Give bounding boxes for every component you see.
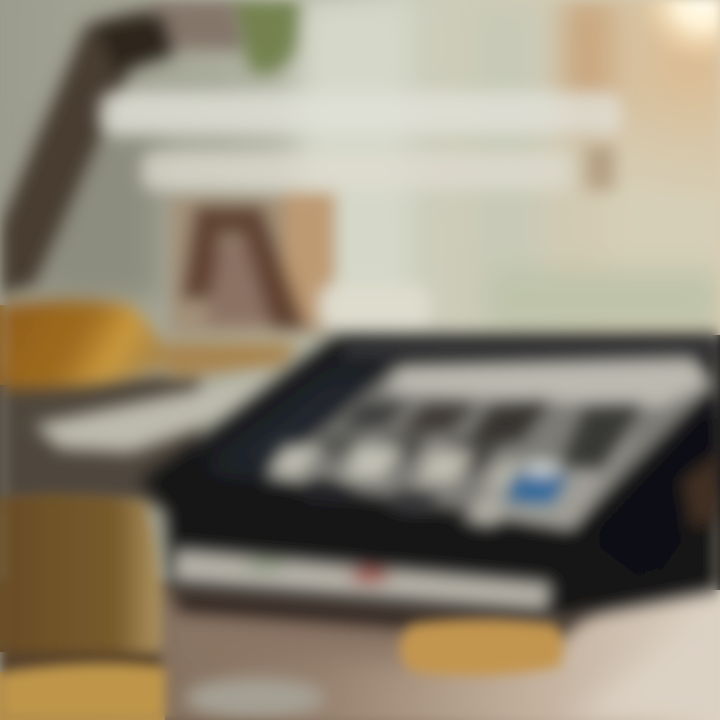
bread block lower left [0,494,162,672]
gold object upper left [0,300,298,389]
strip shadow [170,592,600,640]
blurred title bars [100,92,622,190]
green plant [228,0,300,74]
sunlight glow [540,0,720,210]
gold block bottom left [0,664,165,720]
white paper [35,378,300,452]
calculator keys [266,402,642,527]
calculator light panel [265,358,716,530]
blue key [506,460,568,504]
left mid shadow band [0,375,200,505]
right panel edge [590,395,720,580]
lamp silhouette [0,0,240,295]
white strip [172,548,552,612]
calculator body [140,335,720,620]
table surface [0,580,720,720]
glass jar [170,190,430,335]
gold bar on table [400,620,564,676]
